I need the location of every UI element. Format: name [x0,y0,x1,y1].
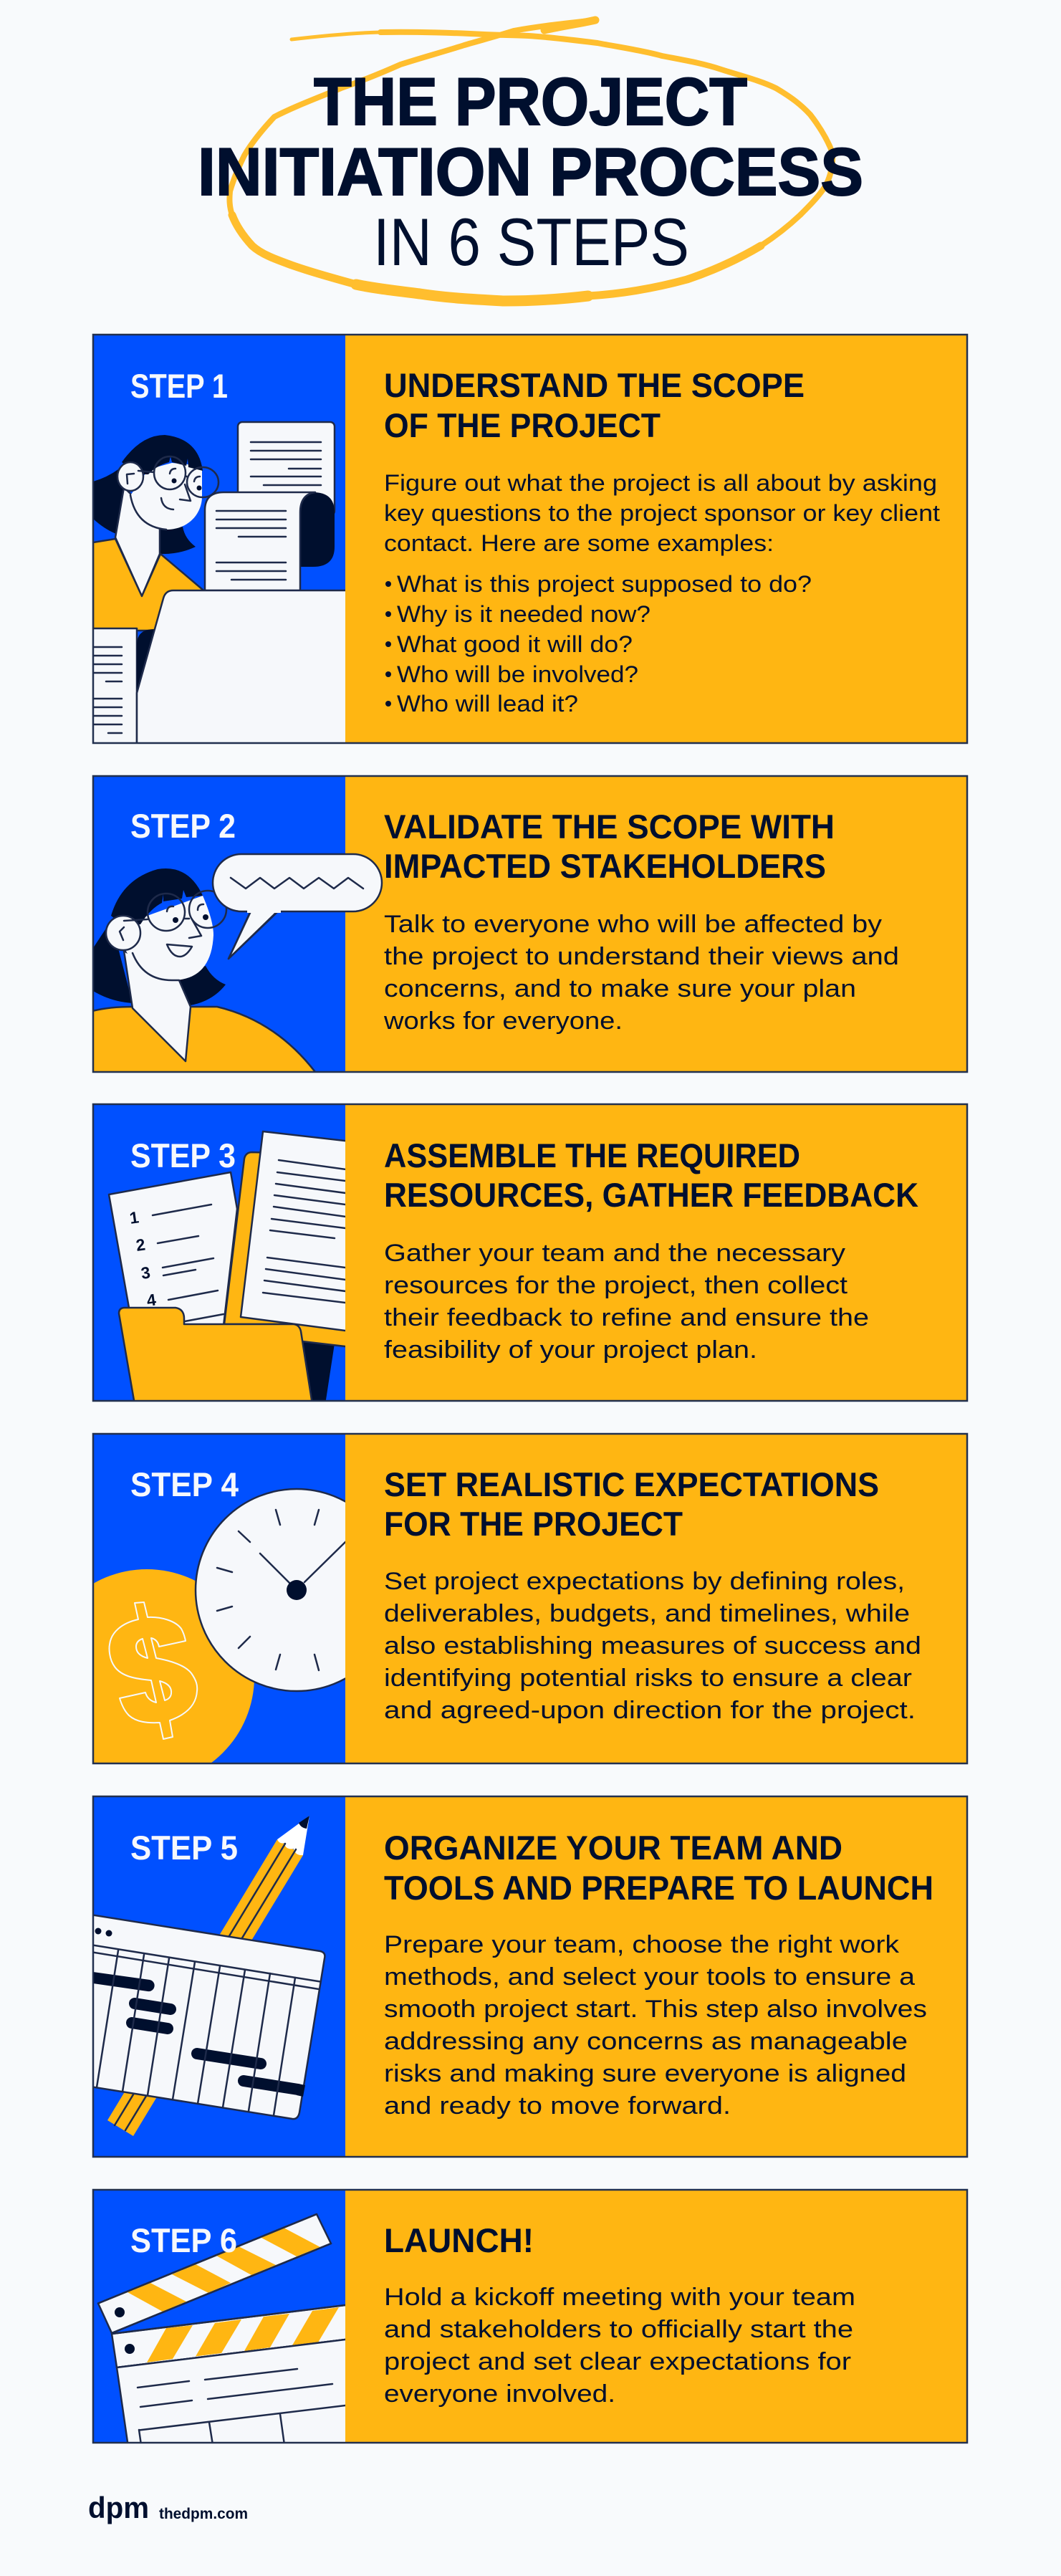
step 4 blue background [93,1434,345,1763]
step 1 label: STEP 1 [130,367,228,405]
step 2 body text: Talk to everyone who will be affected by [384,911,882,938]
step 2 body text: works for everyone. [383,1007,623,1035]
illustration: person talking [90,868,317,1075]
step 4 border [93,1434,967,1763]
step 3 border [93,1104,967,1401]
step 5 body text: risks and making sure everyone is aligned [384,2060,906,2087]
illustration: person at desk with papers [86,422,351,750]
step 6 yellow background [345,2190,967,2443]
panel: step 5 [86,1796,967,2157]
step 1 body text: contact. Here are some examples: [384,530,774,556]
step 3 label: STEP 3 [130,1136,236,1174]
list numbers [130,1212,156,1306]
clapper lower arm [112,2304,351,2367]
panel: step 2 [90,776,967,1075]
step 3 body text: Gather your team and the necessary [384,1240,845,1267]
title line 2: INITIATION PROCESS [198,134,863,209]
step 3 body text: feasibility of your project plan. [384,1336,757,1364]
step 4 heading: SET REALISTIC EXPECTATIONS [384,1465,879,1503]
step 5 body text: Prepare your team, choose the right work [384,1931,900,1958]
website url: thedpm.com [159,2506,248,2522]
step 4 body text: also establishing measures of success and [384,1632,921,1660]
step 5 label: STEP 5 [130,1829,238,1867]
step 3 heading [384,1136,918,1214]
step 3 body text: their feedback to refine and ensure the [384,1304,869,1331]
step 4 body text [384,1568,921,1724]
step 1 bullet list: Why is it needed now? [397,601,650,627]
illustration: coin and clock [94,1488,345,1763]
title line 1: THE PROJECT [314,64,747,139]
illustration: folder with documents [109,1131,351,1404]
step 2 heading: VALIDATE THE SCOPE WITH [384,808,835,846]
clock [195,1488,345,1692]
step 1 bullet list: Who will lead it? [397,691,578,717]
illustration: film clapperboard [98,2214,351,2447]
step 5 body text: and ready to move forward. [384,2092,731,2120]
step 3 heading: ASSEMBLE THE REQUIRED [384,1136,800,1174]
step 3 heading: RESOURCES, GATHER FEEDBACK [384,1176,918,1214]
panel: step 3 [93,1104,967,1404]
step 5 body text: addressing any concerns as manageable [384,2028,908,2055]
step 2 heading: IMPACTED STAKEHOLDERS [384,847,826,885]
step 2 yellow background [345,776,967,1072]
step 2 label: STEP 2 [130,807,236,845]
step 6 body text [384,2284,855,2408]
hand-drawn yellow ring [229,20,832,301]
step 1 body text: key questions to the project sponsor or key client [384,500,940,526]
step 5 body text: methods, and select your tools to ensure a [384,1963,915,1991]
step 3 body text [384,1240,869,1364]
step 3 blue background [93,1104,345,1401]
step 6 label: STEP 6 [130,2221,237,2259]
dpm logo: dpm [88,2491,149,2524]
step 6 blue background [93,2190,345,2443]
step 6 body text: everyone involved. [384,2380,615,2408]
step 4 heading: FOR THE PROJECT [384,1505,683,1543]
step 4 heading [384,1465,879,1543]
list numbers: 3 [140,1263,151,1283]
step 3 yellow background [345,1104,967,1401]
title line 3: IN 6 STEPS [373,204,689,279]
step 1 heading: UNDERSTAND THE SCOPE [384,366,805,404]
step 2 border [93,776,967,1072]
clapper body [117,2339,351,2447]
step 1 heading [384,366,805,444]
step 5 blue background [93,1796,345,2157]
step 5 border [93,1796,967,2157]
step 6 body text: project and set clear expectations for [384,2348,851,2375]
step 5 body text: smooth project start. This step also involves [384,1996,927,2023]
step 4 body text: identifying potential risks to ensure a clear [384,1665,912,1692]
step 4 body text: Set project expectations by defining roles, [384,1568,905,1595]
step 6 body text: Hold a kickoff meeting with your team [384,2284,855,2311]
step 1 heading: OF THE PROJECT [384,406,661,444]
list numbers: 1 [128,1207,140,1227]
step 4 body text: deliverables, budgets, and timelines, while [384,1600,910,1627]
step 2 body text: the project to understand their views and [384,943,899,970]
step 6 body text: and stakeholders to officially start the [384,2316,853,2343]
pencil [107,1816,309,2136]
step 4 yellow background [345,1434,967,1763]
list numbers: 2 [135,1235,146,1255]
step 2 body text: concerns, and to make sure your plan [384,975,856,1002]
step 5 yellow background [345,1796,967,2157]
title block [198,20,863,301]
step 1 bullet list [385,571,812,717]
step 5 body text [384,1931,927,2120]
step 2 body text [383,911,899,1035]
step 1 bullet list: Who will be involved? [397,661,638,687]
panel: step 4 [92,1433,969,1764]
step 2 blue background [93,776,345,1072]
step 3 body text: resources for the project, then collect [384,1272,848,1299]
gantt window [86,1914,325,2119]
step 1 yellow background [345,335,967,743]
dollar coin [94,1569,254,1763]
step 5 heading: ORGANIZE YOUR TEAM AND [384,1829,842,1867]
step 4 label: STEP 4 [130,1465,239,1503]
list numbers: 4 [145,1290,158,1310]
step 5 heading: TOOLS AND PREPARE TO LAUNCH [384,1869,933,1907]
step 6 border [93,2190,967,2443]
step 1 bullet list: What is this project supposed to do? [397,571,812,597]
step 1 bullet list: What good it will do? [397,631,633,657]
clapper upper arm [98,2214,331,2333]
panel: step 6 [93,2190,967,2447]
panel: step 1 [86,335,967,750]
speech bubble [213,854,382,959]
step 1 blue background [93,335,345,743]
step 4 body text: and agreed-upon direction for the project. [384,1697,916,1724]
step 1 border [93,335,967,743]
footer logo and url [88,2491,248,2524]
step 2 heading [384,808,835,885]
step 1 body text [384,470,940,556]
step 6 heading: LAUNCH! [384,2221,534,2259]
step 1 body text: Figure out what the project is all about by asking [384,470,937,496]
illustration: pencil and gantt chart [86,1816,325,2136]
step 5 heading [384,1829,933,1907]
